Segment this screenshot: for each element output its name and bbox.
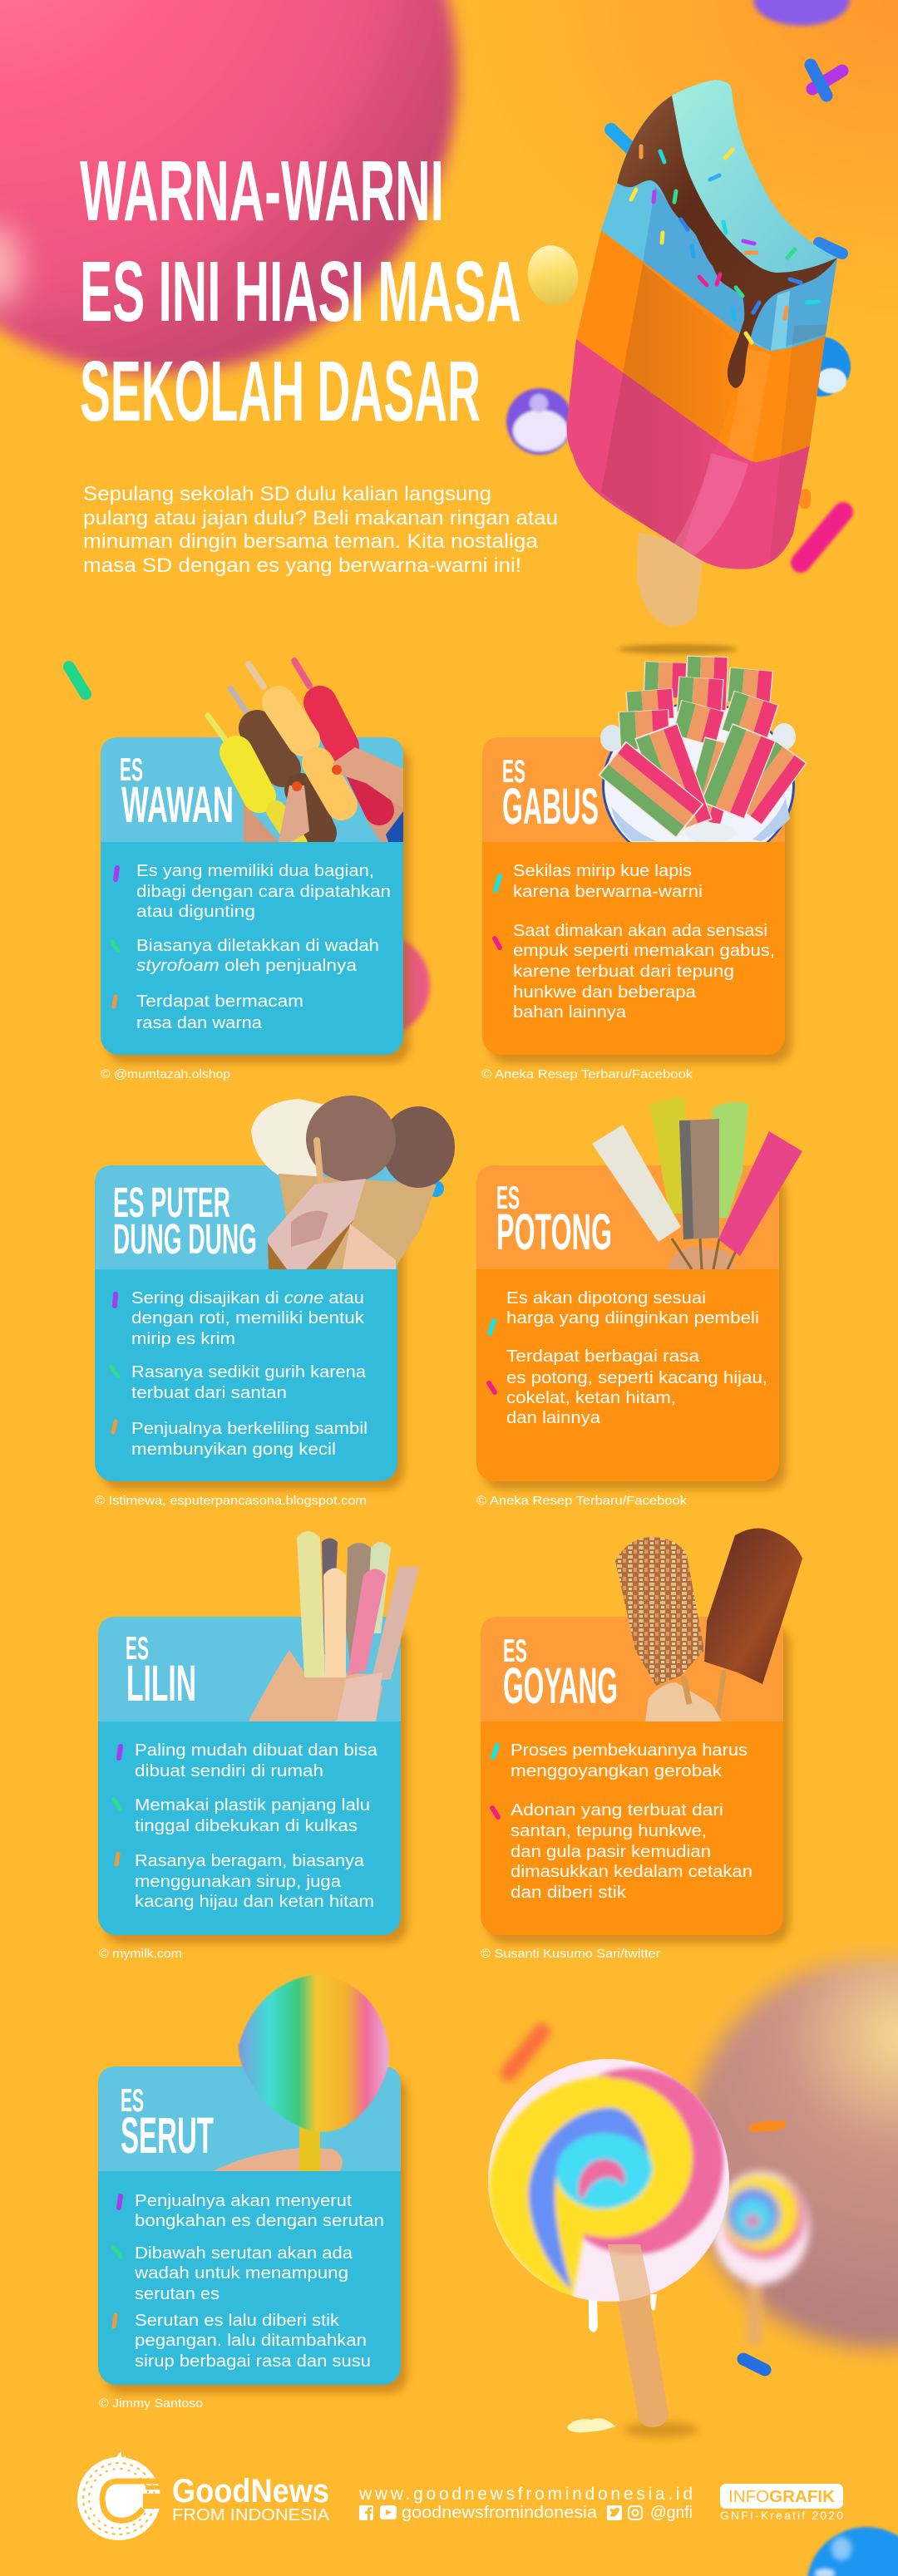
card base — [101, 737, 410, 1063]
bullet list: bongkahan es dengan serutan — [135, 2212, 384, 2230]
icon: youtube — [380, 2505, 397, 2519]
bullet list: Paling mudah dibuat dan bisa — [135, 1741, 378, 1760]
illustration: main popsicle — [567, 80, 837, 627]
bullet list: mirip es krim — [131, 1330, 235, 1348]
intro paragraph — [83, 483, 558, 577]
decorative blue ball, bottom corner — [807, 2527, 898, 2576]
photo credit: © Aneka Resep Terbaru/Facebook — [476, 1494, 688, 1508]
photo: ice cream in cone — [251, 1096, 455, 1272]
decorative blurred sprinkles — [509, 2032, 780, 2130]
popsicle body — [567, 80, 837, 569]
decorative blurred ball, bottom right — [686, 1958, 898, 2348]
bullet list: Es akan dipotong sesuai — [506, 1289, 706, 1308]
bullet list: Penjualnya akan menyerut — [135, 2192, 352, 2210]
title: SEKOLAH DASAR — [80, 343, 481, 439]
bullet list — [489, 1289, 767, 1427]
card base — [476, 1165, 786, 1490]
heading: ES — [120, 752, 143, 788]
bullet list: atau digunting — [136, 903, 255, 921]
card base — [95, 1165, 404, 1490]
bullet list: dimasukkan kedalam cetakan — [511, 1863, 752, 1881]
bullet list: cokelat, ketan hitam, — [506, 1389, 676, 1407]
bullet list: terbuat dari santan — [131, 1384, 287, 1402]
card base — [98, 1617, 407, 1943]
bullet list: Saat dimakan akan ada sensasi — [513, 922, 767, 940]
card base — [98, 2066, 407, 2393]
intro paragraph: Sepulang sekolah SD dulu kalian langsung — [83, 483, 491, 505]
logo wordmark: GoodNews — [172, 2473, 329, 2510]
bullet list: styrofoam oleh penjualnya — [136, 957, 358, 975]
card base — [481, 1617, 790, 1943]
bullet list — [492, 1741, 752, 1902]
photo: es goyang bars — [615, 1529, 802, 1721]
photo credit: © Aneka Resep Terbaru/Facebook — [481, 1067, 693, 1081]
heading: DUNG DUNG — [113, 1215, 257, 1263]
bullet list: Terdapat bermacam — [136, 992, 303, 1011]
heading: GOYANG — [503, 1657, 618, 1714]
bullet list: empuk seperti memakan gabus, — [513, 942, 775, 960]
website address: www.goodnewsfromindonesia.id — [358, 2485, 693, 2504]
bullet list: serutan es — [135, 2285, 220, 2303]
title: WARNA-WARNI — [80, 143, 444, 239]
decorative blurred pink blob behind cards — [327, 933, 430, 1037]
icon: instagram — [629, 2506, 642, 2519]
bullet list: membunyikan gong kecil — [131, 1441, 336, 1459]
bullet list — [111, 1289, 368, 1459]
bullet list: wadah untuk menampung — [134, 2264, 348, 2283]
logo wordmark — [172, 2473, 330, 2524]
title: ES INI HIASI MASA — [80, 244, 521, 339]
heading: LILIN — [126, 1655, 196, 1712]
decorative green sprinkle — [69, 667, 86, 694]
heading — [113, 1179, 257, 1263]
bullet list: karene terbuat dari tepung — [513, 963, 734, 981]
bullet list: dibuat sendiri di rumah — [135, 1762, 323, 1781]
bullet list: rasa dan warna — [136, 1014, 263, 1032]
logo wordmark: FROM INDONESIA — [172, 2506, 330, 2524]
bullet list: tinggal dibekukan di kulkas — [135, 1817, 358, 1835]
decorative blue sprinkle — [743, 2359, 765, 2370]
stick shadow — [624, 2421, 698, 2438]
decorative candies and sprinkles, top — [506, 0, 851, 654]
bullet list: Terdapat berbagai rasa — [506, 1347, 700, 1366]
bullet list: menggunakan sirup, juga — [135, 1873, 342, 1891]
card base — [482, 737, 792, 1063]
bullet list: dan gula pasir kemudian — [511, 1843, 711, 1861]
heading: ES PUTER — [113, 1179, 230, 1226]
photo: es potong sticks — [592, 1096, 802, 1269]
popsicle stick — [637, 532, 704, 627]
heading — [502, 754, 599, 835]
panel: Es Gabus — [482, 656, 807, 1063]
bullet list: hunkwe dan beberapa — [513, 983, 697, 1002]
swirl body — [488, 2059, 729, 2302]
photo credit: © Jimmy Santoso — [99, 2396, 203, 2411]
logo emblem — [77, 2451, 166, 2540]
bullet list: Es yang memiliki dua bagian, — [136, 862, 374, 880]
title — [80, 143, 521, 439]
heading: GABUS — [502, 778, 599, 835]
bullet list: Rasanya sedikit gurih karena — [131, 1363, 367, 1382]
splat on ground — [567, 2418, 615, 2432]
bullet list: dibagi dengan cara dipatahkan — [136, 883, 391, 901]
heading: WAWAN — [121, 776, 234, 833]
bullet list: kacang hijau dan ketan hitam — [135, 1893, 374, 1911]
bullet list: harga yang diinginkan pembeli — [506, 1309, 759, 1327]
bullet list — [495, 862, 775, 1022]
heading: ES — [121, 2083, 144, 2119]
bullet list: Memakai plastik panjang lalu — [135, 1796, 370, 1815]
panel: Es Potong — [476, 1096, 802, 1490]
heading — [496, 1180, 612, 1260]
decorative blurred pink ball — [0, 0, 457, 374]
heading: SERUT — [121, 2107, 214, 2164]
footer logo: GoodNews From Indonesia — [77, 2451, 330, 2540]
photo: rainbow shaved ice — [213, 1974, 389, 2171]
bullet list: dan diberi stik — [511, 1884, 627, 1902]
bullet list: santan, tepung hunkwe, — [511, 1822, 707, 1840]
bullet list: es potong, seperti kacang hijau, — [506, 1369, 767, 1387]
illustration: large swirl popsicle — [482, 2053, 740, 2438]
bullet list: menggoyangkan gerobak — [511, 1762, 723, 1781]
panel: Es Wawan — [101, 661, 410, 1063]
footer badge: infografik: GNFI-Kreatif 2020 — [720, 2509, 843, 2522]
photo: es gabus on plate — [599, 655, 807, 842]
decorative blue blob behind ice cream — [427, 1180, 444, 1197]
icon: facebook — [359, 2505, 373, 2520]
bullet list: Rasanya beragam, biasanya — [135, 1852, 365, 1870]
heading: ES — [496, 1180, 520, 1216]
pale highlight on pink ball — [0, 224, 21, 308]
panel: Es Serut — [98, 1974, 407, 2393]
bullet list — [114, 1741, 378, 1911]
bullet list: Proses pembekuannya harus — [511, 1741, 748, 1760]
bullet list: Penjualnya berkeliling sambil — [131, 1420, 368, 1438]
illustration: small blurred swirl popsicle — [713, 2171, 809, 2346]
bullet list: Sekilas mirip kue lapis — [513, 862, 692, 880]
footer: website and social media — [358, 2485, 693, 2522]
panel: Es Puter Dung Dung — [95, 1096, 455, 1490]
panel: Es Goyang — [481, 1529, 802, 1943]
footer badge: infografik — [720, 2484, 843, 2522]
photo credit: © mymilk.com — [99, 1947, 182, 1961]
heading: ES — [502, 754, 525, 790]
bullet list: bahan lainnya — [513, 1003, 627, 1022]
panel: Es Lilin — [98, 1531, 419, 1943]
heading: ES — [503, 1633, 527, 1669]
heading: POTONG — [496, 1204, 612, 1260]
bullet list — [112, 862, 391, 1032]
drips — [589, 2294, 657, 2332]
twitter and instagram handle: @gnfi — [650, 2504, 693, 2522]
heading — [121, 2083, 214, 2164]
photo: es wawan — [208, 661, 403, 844]
chocolate coating — [617, 96, 837, 388]
photo: es lilin in hand — [249, 1531, 419, 1721]
intro paragraph: pulang atau jajan dulu? Beli makanan ringan atau — [83, 507, 558, 529]
sprinkles on popsicle — [631, 146, 819, 342]
footer badge: infografik: INFOGRAFIK — [728, 2488, 836, 2506]
bullet list: Dibawah serutan akan ada — [135, 2244, 353, 2263]
icon: twitter — [607, 2505, 622, 2520]
bullet list — [114, 2192, 384, 2371]
bullet list: dengan roti, memiliki bentuk — [131, 1309, 365, 1327]
heading — [120, 752, 234, 833]
bullet list: Adonan yang terbuat dari — [511, 1801, 723, 1820]
bullet list: sirup berbagai rasa dan susu — [135, 2352, 371, 2371]
heading — [126, 1631, 196, 1712]
bullet list: Sering disajikan di cone atau — [131, 1289, 364, 1308]
bullet list: pegangan. lalu ditambahkan — [135, 2332, 367, 2350]
bullet list: Biasanya diletakkan di wadah — [136, 937, 379, 955]
photo credit: © Istimewa, esputerpancasona.blogspot.com — [95, 1494, 367, 1508]
bullet list: karena berwarna-warni — [513, 883, 703, 901]
heading: ES — [126, 1631, 149, 1667]
photo credit: © Susanti Kusumo Sari/twitter — [481, 1947, 660, 1961]
intro paragraph: minuman dingin bersama teman. Kita nostaliga — [83, 530, 539, 553]
heading — [503, 1633, 618, 1714]
bullet list: dan lainnya — [506, 1409, 601, 1427]
stick — [608, 2244, 669, 2427]
bullet list: Serutan es lalu diberi stik — [135, 2312, 340, 2330]
youtube and facebook handle: goodnewsfromindonesia — [402, 2504, 598, 2522]
intro paragraph: masa SD dengan es yang berwarna-warni ini! — [83, 554, 521, 577]
photo credit: © @mumtazah.olshop — [101, 1067, 230, 1081]
